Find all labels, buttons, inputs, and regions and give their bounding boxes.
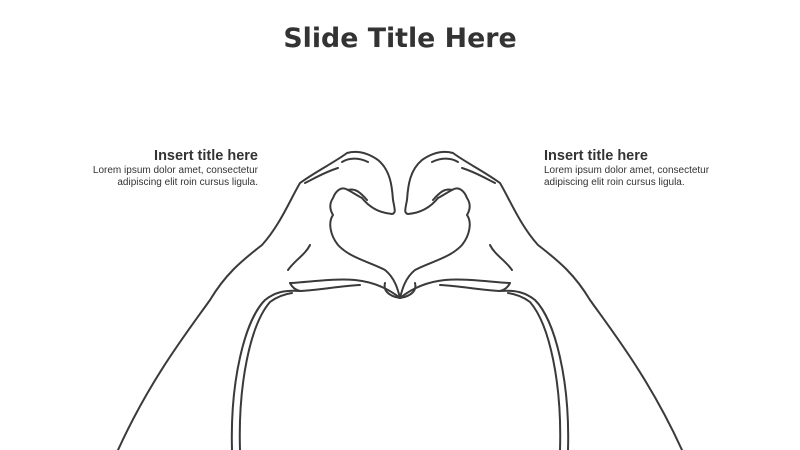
right hand [400, 152, 682, 450]
text block: right [544, 148, 709, 188]
text block: right: adipiscing elit roin cursus ligula. [544, 177, 685, 188]
text block: left: Lorem ipsum dolor amet, consectetur [93, 165, 258, 176]
text block: left [93, 148, 258, 188]
text block: left: Insert title here [154, 148, 258, 164]
text block: left: adipiscing elit roin cursus ligula. [117, 177, 258, 188]
left hand [118, 152, 400, 450]
text block: right: Lorem ipsum dolor amet, consectetur [544, 165, 709, 176]
title: Slide Title Here [283, 23, 517, 54]
text block: right: Insert title here [544, 148, 648, 164]
